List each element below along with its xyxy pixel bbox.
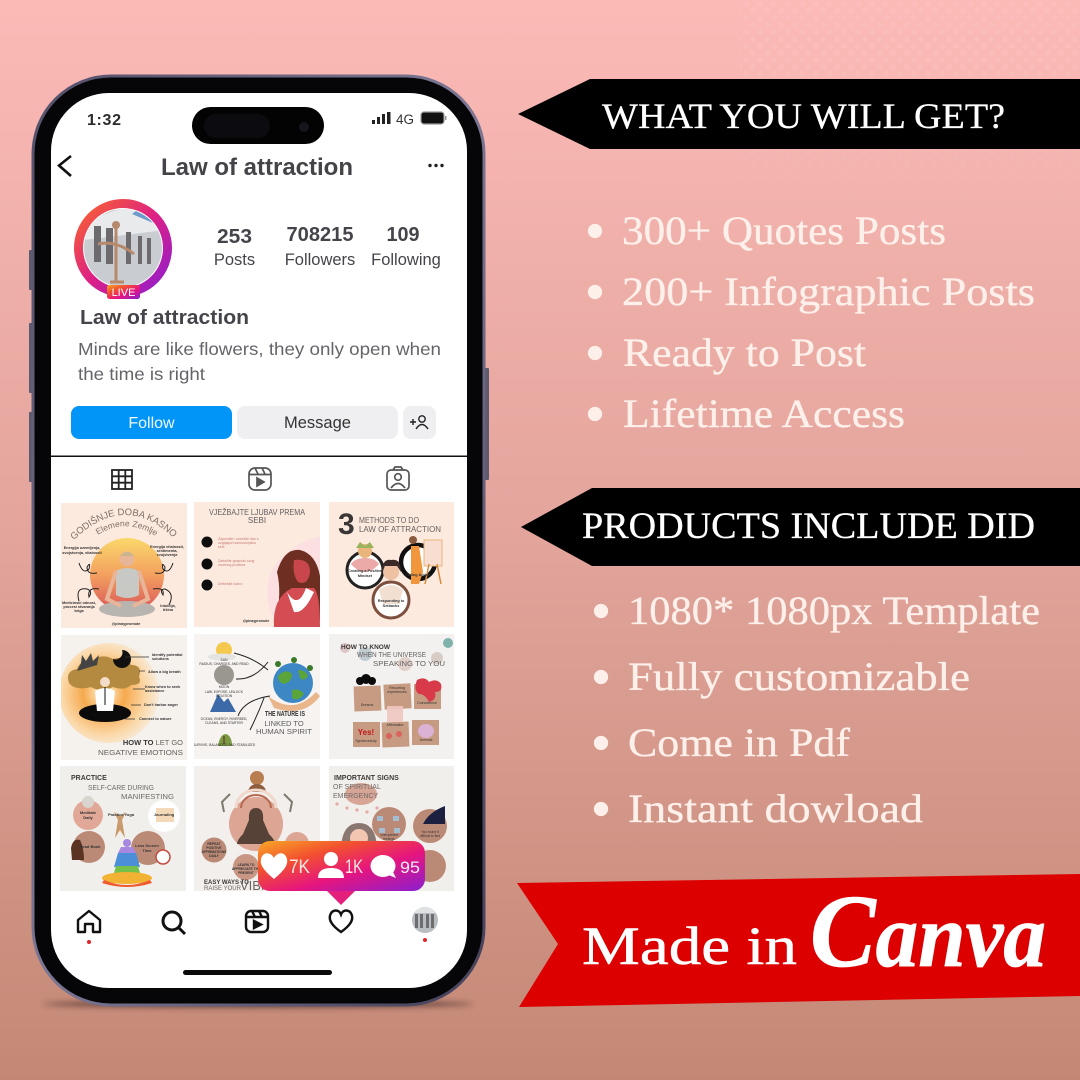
post thumbnail: seasons: GODIŠNJE DOBA KASNO LIETO <box>70 508 176 539</box>
post thumbnail: seasons: @pinaypromote <box>112 622 140 626</box>
halftone dot texture <box>740 0 1080 210</box>
post thumbnail: methods <box>329 502 454 627</box>
post thumbnail: universe signs: SPEAKING TO YOU <box>373 659 445 668</box>
post thumbnail: nature and spirit: RADIUS, CHARGES, AND READ <box>199 662 249 666</box>
post thumbnail: seasons: procesi stvaranja <box>63 605 95 609</box>
followers stat: 708215 <box>286 224 354 246</box>
post thumbnail: raise your vibration: VIBRATION <box>240 878 309 893</box>
post thumbnail: self care: MANIFESTING <box>121 794 174 801</box>
canva text: Canva <box>810 874 1046 989</box>
post thumbnail: universe signs: Affirmation <box>386 723 404 727</box>
gradient ring <box>78 204 168 292</box>
post thumbnail: self care: Daily <box>83 815 94 820</box>
post thumbnail: methods: LAW OF ATTRACTION <box>359 525 441 534</box>
post thumbnail: raise your vibration: DAILY <box>209 854 220 858</box>
posts stat: 253 <box>217 226 252 248</box>
post thumbnail: methods: Taking Action <box>406 573 431 577</box>
post thumbnail: seasons: Elemene Zemlje <box>96 521 157 536</box>
post thumbnail: methods: Creating a Positive <box>348 569 382 573</box>
post thumbnail: universe signs: Animals <box>420 738 433 742</box>
avatar <box>78 204 168 299</box>
status bar <box>87 107 446 144</box>
post thumbnail: raise your vibration: EASY WAYS TO <box>204 880 249 886</box>
post thumbnail: universe signs: Synchronicity <box>355 739 377 743</box>
post thumbnail: self love: Započnite i osvežite dan s <box>218 537 259 541</box>
post thumbnail: spiritual emergency: OF SPIRITUAL <box>333 784 381 791</box>
banner: what you will get <box>518 79 1080 149</box>
grid tab icon <box>112 470 132 489</box>
banner: products include: PRODUCTS INCLUDE DID <box>582 506 1035 547</box>
post thumbnail: nature and spirit <box>193 634 320 759</box>
post thumbnail: seasons: Medicinski odnosi, <box>62 601 96 605</box>
post thumbnail: self love: Zatražite gospodu svog <box>218 559 254 563</box>
post thumbnail: seasons: Intuicija, <box>160 604 176 608</box>
post thumbnail: spiritual emergency: Unexpected <box>380 833 398 837</box>
list item: Fully customizable <box>628 654 970 699</box>
post thumbnail: raise your vibration <box>194 766 320 893</box>
following stat: Following <box>371 251 441 269</box>
back arrow <box>59 156 71 176</box>
post thumbnail: self care: Practice Yoga <box>108 812 135 817</box>
profile name: Law of attraction <box>80 307 249 329</box>
post thumbnail: spiritual emergency: difficult to find <box>420 834 440 838</box>
phone body <box>33 76 484 1005</box>
more dots <box>428 164 444 167</box>
post thumbnail: universe signs <box>329 634 454 759</box>
post thumbnail: let go of negative emotions <box>61 635 187 760</box>
dynamic island <box>192 107 324 144</box>
battery <box>421 112 446 124</box>
bio text: the time is right <box>78 364 205 384</box>
post thumbnail: methods: Responding to <box>378 599 405 603</box>
post thumbnail: methods: Mindset <box>358 574 373 578</box>
post thumbnail: self love: Definišite dobro <box>218 582 242 586</box>
post thumbnail: nature and spirit: MOON <box>219 685 230 689</box>
profile title: Law of attraction <box>161 154 353 181</box>
post thumbnail: seasons: svojstvenja <box>157 553 178 557</box>
following stat: 109 <box>386 224 420 246</box>
post thumbnail: raise your vibration: RAISE YOUR <box>204 886 242 892</box>
posts stat: Posts <box>214 251 255 269</box>
profile header <box>59 154 444 181</box>
post thumbnail: self care: SELF-CARE DURING <box>88 785 154 792</box>
badge pointer <box>325 889 357 905</box>
message button: Message <box>284 414 351 432</box>
comments <box>370 855 420 878</box>
profile icon <box>412 907 438 942</box>
post thumbnail: let go of negative emotions: solutions <box>152 657 169 661</box>
post thumbnail: self care: Time <box>142 848 152 853</box>
post thumbnail: let go of negative emotions: NEGATIVE EMOTIONS <box>98 748 183 757</box>
post thumbnail: spiritual emergency: You found it <box>421 830 439 834</box>
banner: what you will get: WHAT YOU WILL GET? <box>602 96 1005 136</box>
post thumbnail: self love: VJEŽBAJTE LJUBAV PREMA <box>209 508 306 517</box>
followers stat: Followers <box>285 251 355 269</box>
reels icon <box>246 911 268 932</box>
post thumbnail: universe signs: Coincidence <box>417 701 437 705</box>
post thumbnail: seasons: svojstvenja, vitalnosti <box>62 551 102 555</box>
tagged tab icon <box>387 467 409 490</box>
post thumbnail: self care: Meditate <box>80 810 97 815</box>
likes <box>261 853 310 879</box>
post thumbnail: methods: 3 <box>338 508 355 541</box>
post thumbnail: nature and spirit: CLEANS, AND STARTER <box>205 721 244 725</box>
post thumbnail: self care: Less Screen <box>135 843 159 848</box>
followers <box>318 852 363 878</box>
post thumbnail: raise your vibration: PRESENT <box>238 871 254 875</box>
post thumbnail: let go of negative emotions: Don't harbor anger <box>144 703 179 707</box>
post thumbnail: let go of negative emotions: Identify potential <box>152 653 182 657</box>
list item: Lifetime Access <box>623 391 905 436</box>
post thumbnail: let go of negative emotions: assistance <box>145 689 164 693</box>
home icon <box>78 911 100 944</box>
post thumbnail: nature and spirit: LAW, EXPOSE, UNLOCK <box>205 690 244 694</box>
banner: products include <box>521 488 1080 566</box>
post thumbnail: nature and spirit: SUN <box>221 658 228 662</box>
followers: 1K <box>345 857 363 878</box>
post thumbnail: raise your vibration: AFFIRMATIONS <box>202 850 227 854</box>
post thumbnail: universe signs: Dreams <box>361 703 373 707</box>
list item: Instant dowload <box>628 786 923 831</box>
post thumbnail: spiritual emergency: EMERGENCY <box>333 793 378 800</box>
phone screen <box>51 93 467 988</box>
search icon <box>163 912 185 934</box>
badge body <box>258 841 425 891</box>
post thumbnail: self care: Journaling <box>154 812 175 817</box>
statue photo <box>84 209 162 285</box>
post thumbnail: self love: @pinaypromote <box>243 619 269 623</box>
phone mockup <box>29 74 489 1012</box>
bottom nav <box>78 907 438 944</box>
post thumbnail: spiritual emergency <box>329 766 454 891</box>
followers stat <box>285 224 355 269</box>
network label: 4G <box>396 112 414 127</box>
post thumbnail: self care: PRACTICE <box>71 775 107 782</box>
made in text: Made in <box>582 916 797 976</box>
post thumbnail: nature and spirit: OCEAN, ENERGY, RIVERBED, <box>201 717 247 721</box>
ribbon: made in canva <box>517 874 1080 1007</box>
signal bars <box>372 112 390 124</box>
list item: Come in Pdf <box>628 720 851 765</box>
post thumbnail: seasons <box>61 503 187 628</box>
post thumbnail: spiritual emergency: feelings <box>383 837 395 841</box>
list: products include <box>594 588 1040 831</box>
post thumbnail: spiritual emergency: IMPORTANT SIGNS <box>334 775 399 782</box>
post thumbnail: methods: Setbacks <box>383 604 399 608</box>
post thumbnail: self love: osobnog prostora <box>218 563 245 567</box>
home indicator <box>183 970 332 975</box>
side buttons <box>29 250 489 482</box>
post thumbnail: self care: Read Book <box>80 844 101 849</box>
post thumbnail: seasons: briga <box>74 609 85 613</box>
post thumbnail: methods: METHODS TO DO <box>359 516 419 525</box>
follow button: Follow <box>128 415 175 432</box>
post thumbnail: nature and spirit: SURVIVE, BALANCED, AND STABILIZED <box>193 743 256 747</box>
post thumbnail: self love: SEBI <box>248 516 266 525</box>
divider <box>51 456 467 457</box>
comments: 95 <box>400 858 420 877</box>
post thumbnail: universe signs: WHEN THE UNIVERSE <box>357 652 426 659</box>
bio text: Minds are like flowers, they only open when <box>78 339 441 359</box>
live badge: LIVE <box>112 287 135 299</box>
post thumbnail: let go of negative emotions: Know when to seek <box>145 685 181 689</box>
post thumbnail: nature and spirit: LINKED TO <box>264 719 304 728</box>
post thumbnail: raise your vibration: POSITIVE <box>206 846 222 850</box>
list item: 300+ Quotes Posts <box>622 208 946 253</box>
list item: 1080* 1080px Template <box>628 588 1040 633</box>
following stat <box>371 224 441 269</box>
heart icon <box>330 910 352 932</box>
post thumbnail: let go of negative emotions: Connect to nature <box>139 717 172 721</box>
post thumbnail: universe signs: experiences <box>387 690 407 694</box>
post thumbnail: universe signs: HOW TO KNOW <box>341 644 391 651</box>
post thumbnail: universe signs: Recurring <box>389 686 405 690</box>
follow button <box>71 406 232 439</box>
post thumbnail: self love <box>194 502 320 627</box>
post thumbnail: nature and spirit: INTUITION <box>216 694 233 698</box>
posts stat <box>214 226 255 269</box>
message button <box>237 406 398 439</box>
post thumbnail: seasons: Energija uzemljenja, <box>64 546 100 550</box>
post thumbnail: seasons: sentimenta, <box>156 549 178 553</box>
time: 1:32 <box>87 112 121 129</box>
phone shadow <box>43 1000 473 1008</box>
post thumbnail: raise your vibration: LEARN TO <box>238 863 255 867</box>
post thumbnail: raise your vibration: REPEAT <box>207 842 221 846</box>
list: what you will get <box>588 208 1035 436</box>
reels tab icon <box>249 468 271 490</box>
post thumbnail: self love: sebi <box>218 545 225 549</box>
post thumbnail: let go of negative emotions: Allow a big breath <box>148 670 181 674</box>
bio text <box>78 339 441 384</box>
post thumbnail: seasons: tišina <box>163 608 174 612</box>
post thumbnail: seasons: Energija vitalnosti, <box>150 545 184 549</box>
post thumbnail: self love: uzgajajući samoubojstvo <box>218 541 256 545</box>
list item: 200+ Infographic Posts <box>622 269 1035 314</box>
post thumbnail: let go of negative emotions: HOW TO LET GO <box>123 738 183 747</box>
post thumbnail: universe signs: Yes! <box>358 728 374 737</box>
post thumbnail: raise your vibration: APPRECIATE THE <box>232 867 261 871</box>
likes: 7K <box>289 857 310 878</box>
engagement badge <box>258 841 425 905</box>
post thumbnail: nature and spirit: HUMAN SPIRIT <box>256 727 312 736</box>
post thumbnail: self care <box>60 766 186 891</box>
list item: Ready to Post <box>623 330 866 375</box>
add friend button <box>403 406 436 439</box>
profile stats <box>214 224 441 269</box>
